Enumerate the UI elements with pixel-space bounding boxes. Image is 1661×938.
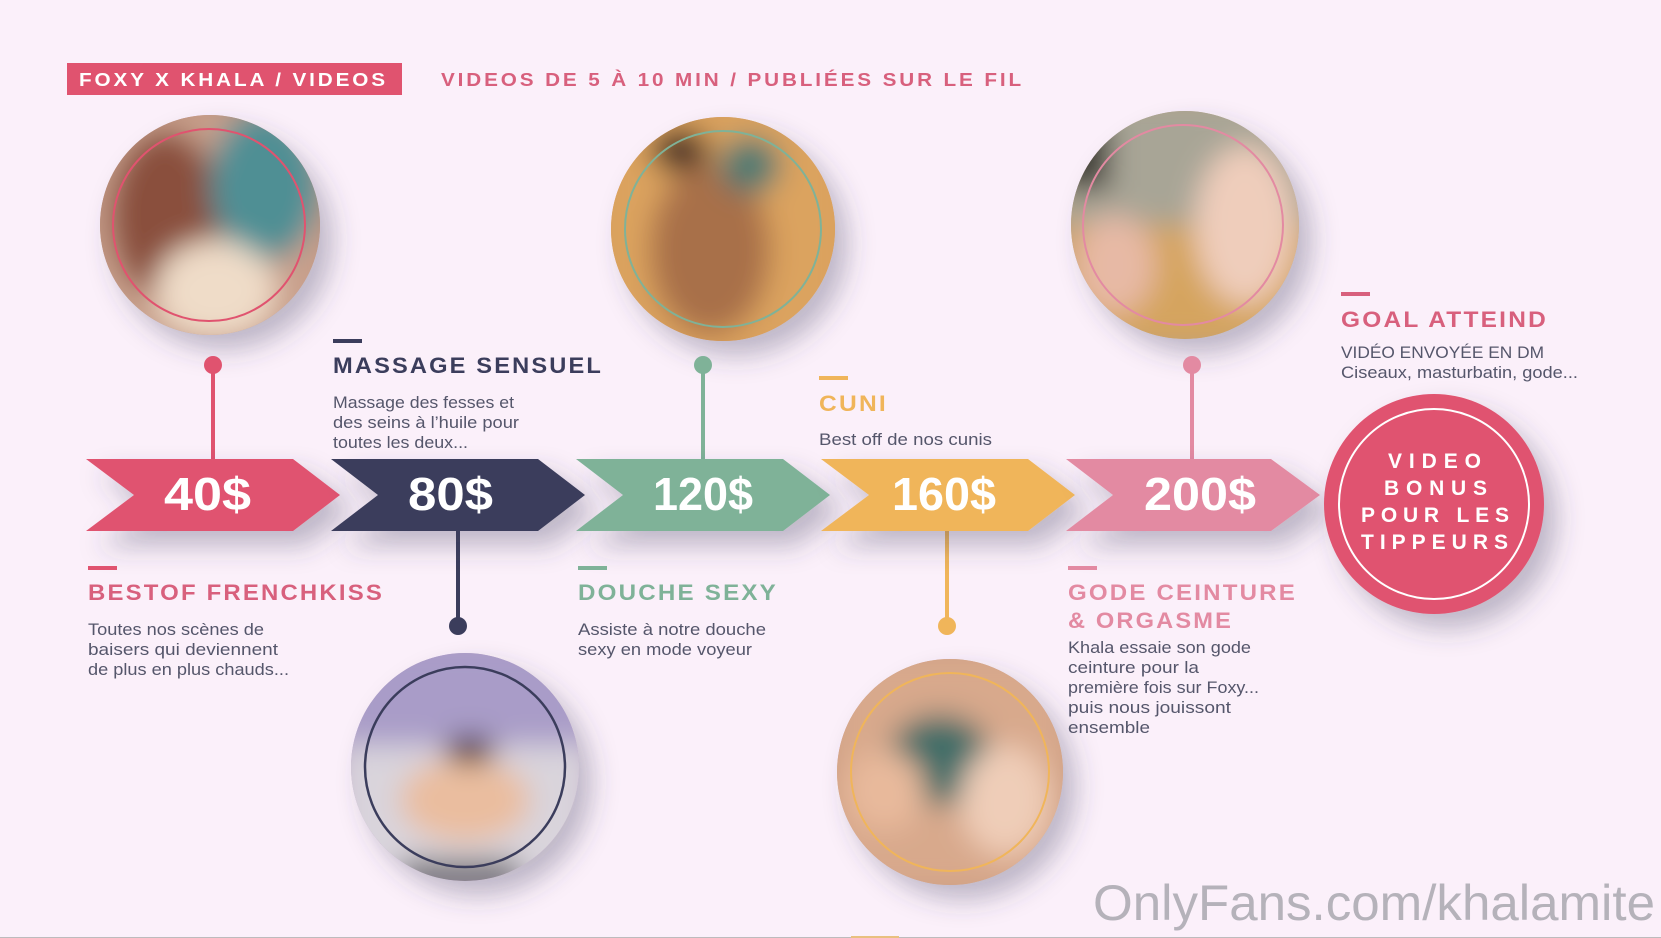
text block: goal atteind: GOAL ATTEIND: [1341, 307, 1548, 332]
text block: bestof frenchkiss: [88, 566, 384, 679]
text block: cuni: CUNI: [819, 391, 888, 416]
text block: bestof frenchkiss: baisers qui deviennent: [88, 640, 278, 659]
text block: douche sexy: [578, 566, 778, 659]
text block: douche sexy: Assiste à notre douche: [578, 620, 766, 639]
text block: douche sexy: DOUCHE SEXY: [578, 580, 778, 605]
text block: goal atteind: [1341, 292, 1578, 382]
text block: cuni: [819, 376, 992, 449]
bonus circle: TIPPEURS: [1361, 531, 1508, 554]
text block: bestof frenchkiss: de plus en plus chauds...: [88, 660, 289, 679]
text block: massage sensuel: MASSAGE SENSUEL: [333, 353, 603, 378]
arrow: 120$: 120$: [653, 468, 753, 520]
text block: bestof frenchkiss: Toutes nos scènes de: [88, 620, 264, 639]
arrow: 80$: 80$: [408, 468, 493, 520]
text block: gode ceinture: ensemble: [1068, 718, 1150, 737]
text block: goal atteind: Ciseaux, masturbatin, gode...: [1341, 363, 1578, 382]
bonus circle: [1324, 394, 1544, 614]
arrow: 40$: 40$: [164, 468, 251, 520]
arrow: 200$: 200$: [1144, 468, 1256, 520]
text block: gode ceinture: [1068, 566, 1297, 737]
connector: 200$: [1183, 356, 1201, 460]
arrow: 160$: 160$: [892, 468, 996, 520]
header badge: [67, 63, 402, 95]
connector: 80$: [449, 530, 467, 635]
photo placeholder 5 with pink ring: [1060, 100, 1310, 345]
text block: gode ceinture: & ORGASME: [1068, 608, 1233, 633]
text block: massage sensuel: [333, 339, 603, 452]
text block: goal atteind: VIDÉO ENVOYÉE EN DM: [1341, 343, 1544, 362]
arrow: 200$: [1066, 459, 1320, 531]
text block: gode ceinture: Khala essaie son gode: [1068, 638, 1251, 657]
text block: gode ceinture: puis nous jouissont: [1068, 698, 1231, 717]
text block: massage sensuel: Massage des fesses et: [333, 393, 514, 412]
arrow: 40$: [86, 459, 340, 531]
photo placeholder 4 with yellow ring: [830, 650, 1070, 890]
header badge: FOXY X KHALA / VIDEOS: [79, 70, 388, 90]
bonus circle: POUR LES: [1361, 504, 1509, 527]
arrow: 80$: [331, 459, 585, 531]
photo placeholder 3 with green ring: [600, 105, 850, 355]
text block: douche sexy: sexy en mode voyeur: [578, 640, 752, 659]
text block: massage sensuel: des seins à l’huile pour: [333, 413, 519, 432]
photo placeholder 1 with pink ring: [90, 105, 330, 345]
bonus circle: BONUS: [1384, 477, 1487, 500]
header subtitle: VIDEOS DE 5 À 10 MIN / PUBLIÉES SUR LE FIL: [441, 69, 1024, 90]
text block: gode ceinture: première fois sur Foxy...: [1068, 678, 1259, 697]
text block: bestof frenchkiss: BESTOF FRENCHKISS: [88, 580, 384, 605]
connector: 40$: [204, 356, 222, 460]
text block: gode ceinture: GODE CEINTURE: [1068, 580, 1297, 605]
watermark: OnlyFans.com/khalamite: [1093, 875, 1655, 931]
arrow: 120$: [576, 459, 830, 531]
connector: 120$: [694, 356, 712, 460]
text block: massage sensuel: toutes les deux...: [333, 433, 468, 452]
arrow: 160$: [821, 459, 1075, 531]
photo placeholder 2 with navy ring: [340, 640, 590, 890]
bonus circle: VIDEO: [1388, 450, 1481, 473]
text block: gode ceinture: ceinture pour la: [1068, 658, 1200, 677]
text block: cuni: Best off de nos cunis: [819, 430, 992, 449]
connector: 160$: [938, 530, 956, 635]
